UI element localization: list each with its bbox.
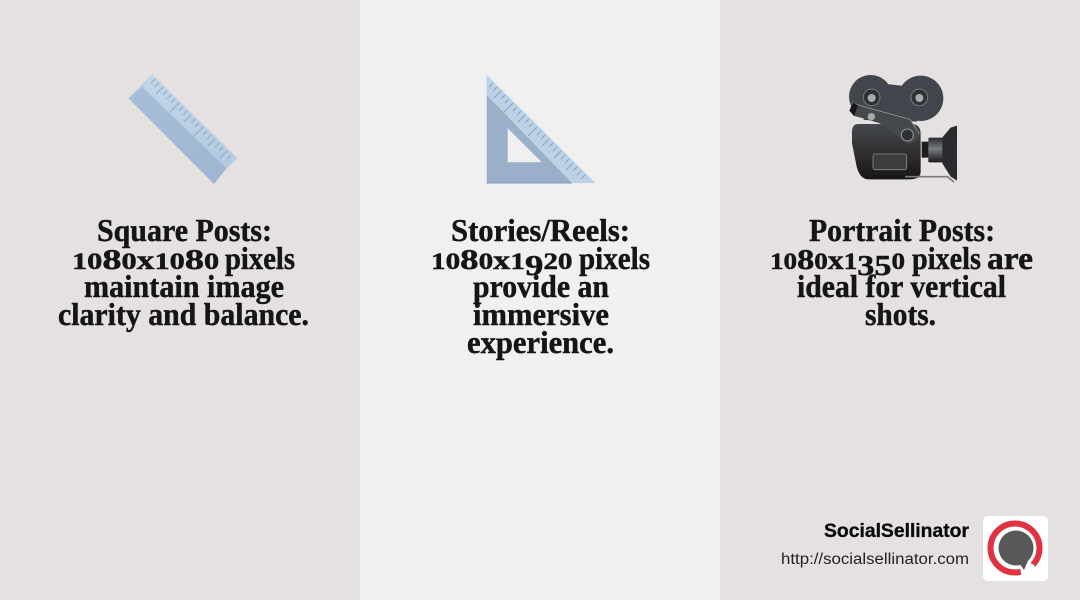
heading: portrait posts: 0: [892, 250, 905, 274]
icon: set square: [487, 75, 595, 183]
heading: stories and reels: [431, 212, 650, 360]
heading: stories and reels: 9: [525, 250, 543, 282]
heading: stories and reels: experience.: [467, 324, 614, 360]
heading: stories and reels: provide an: [473, 268, 609, 304]
panel: stories and reels: [360, 0, 720, 600]
heading: portrait posts: ideal for vertical: [797, 268, 1006, 304]
brand url: http://socialsellinator.com: [781, 551, 969, 568]
icon: ruler: [128, 74, 237, 184]
heading: stories and reels: pixels: [579, 240, 650, 276]
heading: portrait posts: shots.: [865, 296, 936, 332]
logo: [983, 516, 1048, 581]
panel: square posts: [0, 0, 360, 600]
heading: stories and reels: immersive: [473, 296, 609, 332]
heading: square posts: pixels: [225, 240, 295, 276]
heading: portrait posts: Portrait Posts:: [809, 212, 995, 248]
heading: square posts: [58, 212, 309, 332]
heading: square posts: maintain image: [84, 268, 284, 304]
heading: square posts: Square Posts:: [97, 212, 272, 248]
heading: portrait posts: 1080x1: [770, 243, 857, 275]
heading: portrait posts: pixels: [912, 240, 981, 276]
heading: stories and reels: 20: [543, 249, 573, 274]
heading: square posts: clarity and balance.: [58, 296, 309, 332]
heading: portrait posts: 35: [857, 249, 892, 281]
heading: stories and reels: Stories/Reels:: [451, 212, 630, 248]
heading: square posts: 1080x1080: [72, 244, 219, 276]
heading: portrait posts: [770, 212, 1033, 332]
brand name: SocialSellinator: [824, 521, 970, 542]
panel: portrait posts: [720, 0, 1080, 600]
heading: stories and reels: 1080x1: [431, 244, 525, 276]
heading: portrait posts: are: [987, 240, 1033, 276]
icon: film camera: [849, 75, 957, 182]
